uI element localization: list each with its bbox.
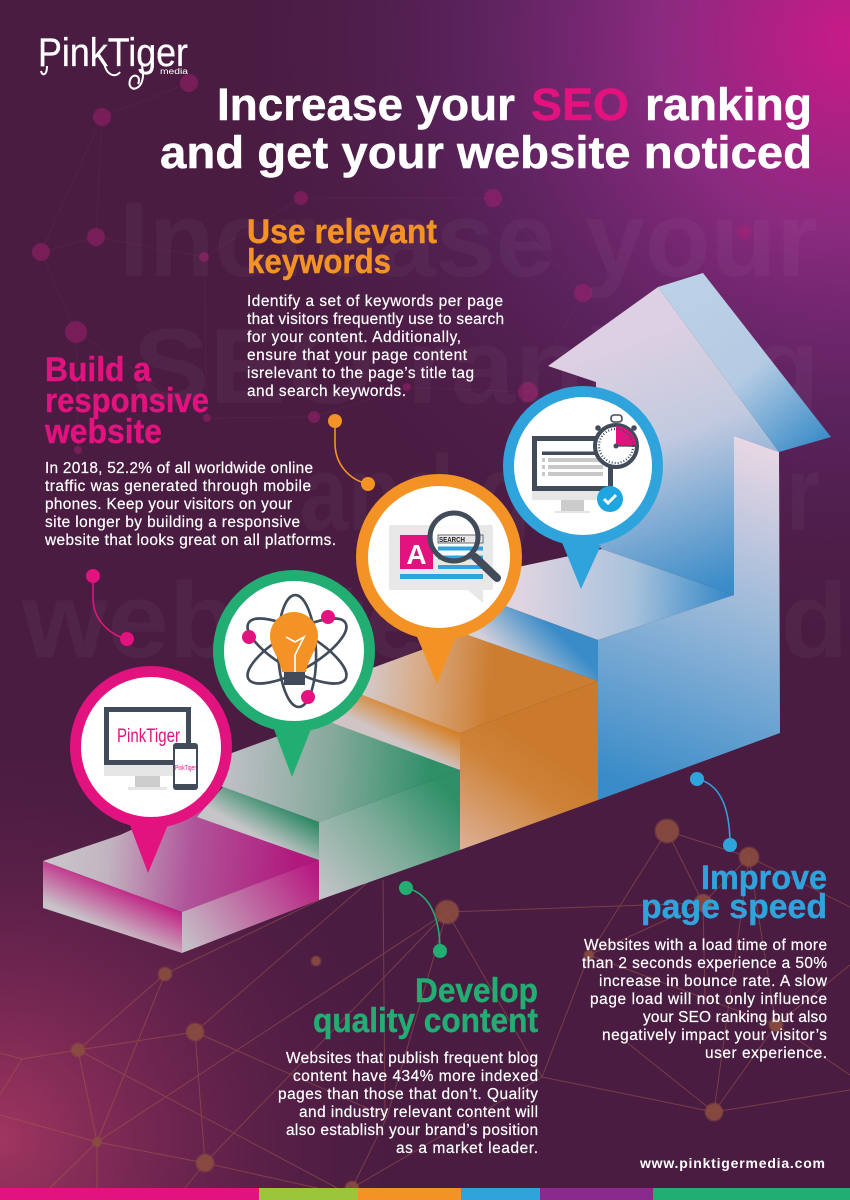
step 3: orange (330, 634, 598, 850)
body text: for your content. Additionally, (247, 329, 461, 346)
body text: website that looks great on all platforms. (44, 532, 336, 549)
panel: build a responsive website (44, 351, 336, 549)
body text: Websites that publish frequent blog (286, 1050, 538, 1067)
network pattern: top (32, 74, 751, 454)
ghost background headline (21, 179, 848, 680)
panel: improve page speed (582, 859, 828, 1062)
panel: use relevant keywords (247, 213, 504, 400)
body text: increase in bounce rate. A slow (599, 973, 828, 990)
title: ranking (645, 79, 812, 130)
connector: green (399, 881, 447, 958)
heading: responsive (45, 382, 209, 420)
staircase arrow (43, 273, 831, 953)
panel: develop quality content (278, 972, 538, 1157)
heading: website (44, 413, 162, 451)
pin: responsive website (76, 672, 226, 873)
body text: that visitors frequently use to search (247, 311, 504, 328)
connector: blue (690, 772, 737, 852)
heading: Improve (701, 859, 827, 897)
heading: Build a (45, 351, 152, 389)
title (160, 79, 812, 178)
connector: orange (328, 414, 375, 491)
heading (313, 972, 538, 1040)
body text (278, 1050, 538, 1157)
heading: keywords (247, 243, 391, 281)
heading: quality content (313, 1002, 538, 1040)
body text: your SEO ranking but also (643, 1009, 827, 1026)
website url: www.pinktigermedia.com (639, 1155, 825, 1171)
icon: monitor and phone: PinkTiger (117, 726, 181, 747)
body text: than 2 seconds experience a 50% (582, 955, 827, 972)
body text: phones. Keep your visitors on your (45, 496, 292, 513)
network pattern: bottom (0, 820, 850, 1194)
heading: page speed (641, 888, 827, 926)
body text: Websites with a load time of more (584, 937, 827, 954)
pin: keywords (362, 480, 516, 684)
body text: user experience. (705, 1045, 827, 1062)
body text: and industry relevant content will (299, 1104, 538, 1121)
body text: site longer by building a responsive (45, 514, 300, 531)
icon: search magnifier: SEARCH (439, 535, 465, 544)
body text: and search keywords. (247, 383, 406, 400)
step 1: magenta (43, 800, 319, 953)
ghost background headline: Increase your (119, 179, 818, 299)
footer colour bar (0, 1188, 850, 1200)
icon: search magnifier (389, 513, 497, 603)
body text (44, 460, 336, 549)
pin: quality content (218, 576, 370, 777)
step 4: blue (465, 273, 831, 800)
body text: page load will not only influence (590, 991, 827, 1008)
ghost background headline: SEO ranking (133, 306, 820, 426)
body text: negatively impact your visitor’s (602, 1027, 827, 1044)
heading: Develop (415, 972, 538, 1010)
body text: pages than those that don’t. Quality (278, 1086, 538, 1103)
title: and get your website noticed (160, 127, 812, 178)
body text: also establish your brand’s position (286, 1122, 538, 1139)
body text (247, 293, 504, 400)
step 2: green (180, 716, 460, 900)
logo: media (160, 67, 189, 76)
body text (582, 937, 828, 1062)
heading: Use relevant (247, 213, 437, 251)
connector: pink (86, 569, 134, 646)
icon: atom lightbulb (239, 594, 355, 708)
logo: PinkTiger (38, 31, 188, 75)
body text: ensure that your page content (247, 347, 468, 364)
body text: In 2018, 52.2% of all worldwide online (45, 460, 313, 477)
icon: search magnifier: A (406, 539, 427, 570)
heading (247, 213, 437, 281)
icon: monitor and stopwatch (532, 415, 637, 513)
body text: Identify a set of keywords per page (247, 293, 503, 310)
heading (641, 859, 827, 926)
pin: page speed (508, 392, 658, 589)
body text: as a market leader. (396, 1140, 538, 1157)
body text: isrelevant to the page’s title tag (247, 365, 474, 382)
icon: monitor and phone (104, 707, 198, 790)
body text: content have 434% more indexed (293, 1068, 538, 1085)
icon: monitor and phone: PinkTiger (175, 763, 196, 772)
body text: traffic was generated through mobile (45, 478, 311, 495)
title: SEO (531, 79, 629, 130)
title: Increase your (217, 79, 515, 130)
heading (44, 351, 209, 451)
ghost background headline: website noticed (21, 560, 848, 680)
